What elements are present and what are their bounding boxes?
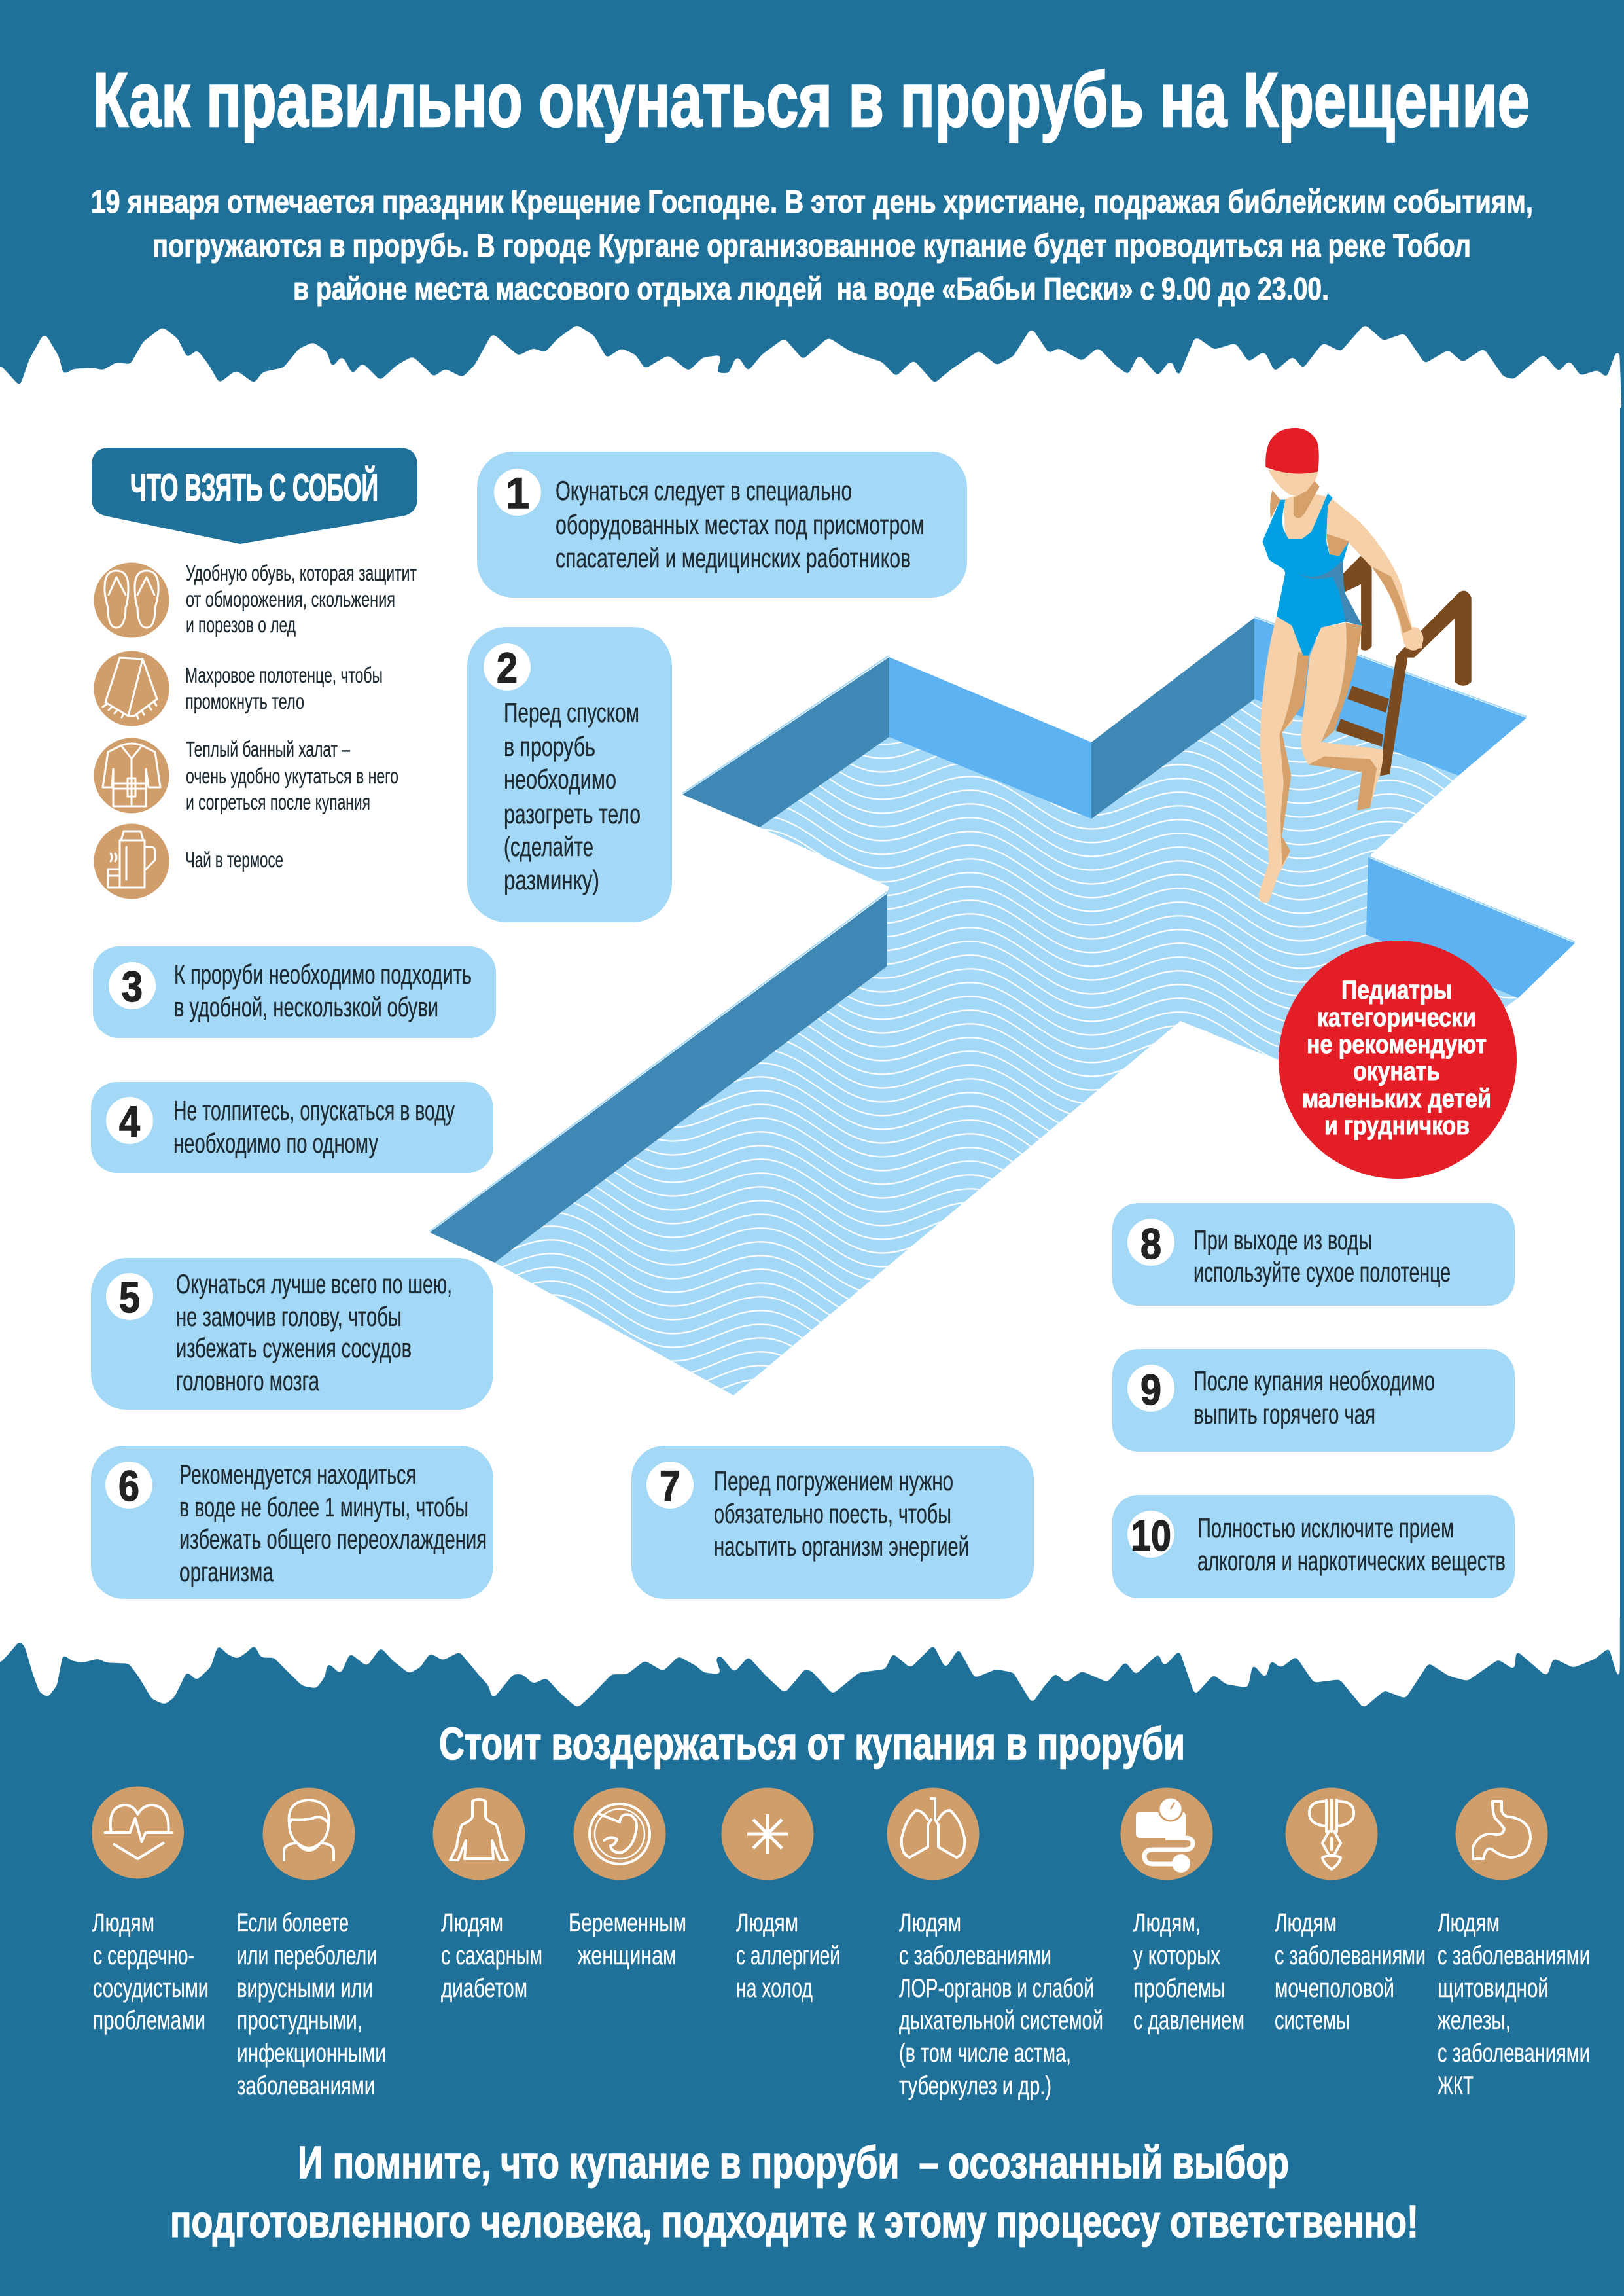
column: viral diseases: простудными,: [237, 2006, 362, 2035]
column: diabetes: диабетом: [441, 1974, 527, 2003]
illustration: cross-shaped ice hole: [430, 428, 1575, 1395]
tip 8: используйте сухое полотенце: [1193, 1257, 1451, 1287]
column: thyroid and gastrointestinal: ЖКТ: [1438, 2072, 1474, 2100]
column: respiratory: (в том числе астма,: [899, 2039, 1071, 2068]
column: cold allergy: с аллергией: [736, 1941, 840, 1970]
tip 3: 3: [122, 962, 143, 1011]
tip 7: насытить организм энергией: [714, 1531, 969, 1562]
swimmer: [1258, 428, 1423, 903]
text: footwear: и порезов о лед: [186, 613, 296, 637]
text: bathrobe: Теплый банный халат –: [186, 737, 350, 761]
text: towel: Махровое полотенце, чтобы: [185, 663, 383, 687]
tip 7: [631, 1446, 1034, 1599]
tip 6: Рекомендуется находиться: [179, 1459, 416, 1490]
icon: torso: [433, 1788, 525, 1880]
text: bathrobe: [186, 737, 398, 814]
icon: stomach: [1455, 1788, 1548, 1880]
column: blood pressure: у которых: [1133, 1941, 1220, 1970]
column: thyroid and gastrointestinal: [1438, 1909, 1590, 2100]
column: heart problems: сосудистыми: [93, 1974, 209, 2003]
text: footwear: [186, 561, 417, 637]
icon: snowflake: [721, 1788, 814, 1880]
tip 3: в удобной, нескользкой обуви: [174, 992, 438, 1022]
column: heart problems: Людям: [92, 1909, 154, 1937]
tip 9: После купания необходимо: [1193, 1365, 1435, 1396]
tip 2: необходимо: [504, 764, 616, 795]
callout: pediatricians warning: и грудничков: [1324, 1111, 1470, 1140]
callout: pediatricians warning: [1279, 941, 1517, 1179]
panel: what to take: [92, 448, 417, 899]
tip 1: Окунаться следует в специально: [556, 475, 852, 506]
text: footwear: от обморожения, скольжения: [186, 587, 395, 611]
closing message: [170, 2137, 1419, 2247]
icon: fetus: [573, 1788, 666, 1880]
column: viral diseases: заболеваниями: [237, 2072, 375, 2100]
icon: thermos: [94, 823, 169, 899]
header: [91, 57, 1533, 307]
heading banner: ЧТО ВЗЯТЬ С СОБОЙ: [130, 467, 378, 509]
tip 8: [1112, 1203, 1515, 1306]
column: viral diseases: вирусными или: [237, 1974, 373, 2003]
text: bathrobe: очень удобно укутаться в него: [186, 764, 398, 788]
text: bathrobe: и согреться после купания: [186, 790, 370, 814]
column: pregnant women: Беременным: [569, 1909, 686, 1937]
icon: person with sore throat: [263, 1788, 355, 1880]
tip 2: Перед спуском: [504, 697, 639, 728]
tip 6: организма: [179, 1556, 274, 1587]
callout: pediatricians warning: Педиатры: [1341, 976, 1452, 1005]
tip 5: Окунаться лучше всего по шею,: [176, 1268, 452, 1299]
tip 10: Полностью исключите прием: [1197, 1513, 1454, 1543]
tip 2: в прорубь: [504, 731, 595, 762]
pool floor with waves: [495, 699, 1518, 1395]
column: viral diseases: Если болеете: [237, 1909, 349, 1937]
column: diabetes: [441, 1909, 542, 2003]
tip 6: [91, 1446, 493, 1599]
tip 9: [1112, 1349, 1515, 1452]
closing message: И помните, что купание в проруби – осознанный выбор: [298, 2137, 1289, 2188]
tip 3: К проруби необходимо подходить: [174, 959, 472, 990]
intro paragraph: [91, 185, 1533, 307]
tip 7: обязательно поесть, чтобы: [714, 1498, 951, 1529]
tip 5: 5: [119, 1273, 140, 1321]
tip 5: [91, 1258, 493, 1410]
heading banner: [92, 448, 417, 544]
column: urinary: с заболеваниями: [1275, 1941, 1426, 1970]
tip 8: При выходе из воды: [1193, 1225, 1372, 1255]
tip 4: необходимо по одному: [173, 1128, 378, 1158]
tip 5: головного мозга: [176, 1365, 319, 1396]
text: towel: [185, 663, 383, 713]
tip 2: разминку): [504, 865, 599, 895]
tip 9: выпить горячего чая: [1193, 1399, 1375, 1429]
column: blood pressure: Людям,: [1133, 1909, 1201, 1937]
column: blood pressure: с давлением: [1133, 2006, 1244, 2035]
column: urinary: мочеполовой: [1275, 1974, 1394, 2003]
text: footwear: Удобную обувь, которая защитит: [186, 561, 417, 585]
column: thyroid and gastrointestinal: Людям: [1438, 1909, 1500, 1937]
column: cold allergy: на холод: [736, 1974, 813, 2003]
column: respiratory: [899, 1909, 1103, 2100]
tip 3: [93, 946, 496, 1038]
column: blood pressure: проблемы: [1133, 1974, 1226, 2003]
callout: pediatricians warning: окунать: [1353, 1057, 1440, 1086]
icon: urinary system: [1285, 1788, 1378, 1880]
column: heart problems: [92, 1909, 209, 2035]
column: blood pressure: [1133, 1909, 1244, 2035]
column: thyroid and gastrointestinal: железы,: [1438, 2006, 1511, 2035]
column: pregnant women: [569, 1909, 686, 1970]
column: respiratory: ЛОР-органов и слабой: [899, 1974, 1094, 2003]
callout: pediatricians warning: не рекомендуют: [1307, 1030, 1487, 1059]
column: pregnant women: женщинам: [578, 1941, 677, 1970]
column: diabetes: с сахарным: [441, 1941, 542, 1970]
column: heart problems: с сердечно-: [93, 1941, 194, 1970]
tip 8: 8: [1140, 1219, 1161, 1268]
column: thyroid and gastrointestinal: щитовидной: [1438, 1974, 1549, 2003]
column: viral diseases: [237, 1909, 386, 2100]
tip 2: [467, 627, 672, 922]
column: viral diseases: инфекционными: [237, 2039, 386, 2068]
tip 10: 10: [1131, 1511, 1171, 1560]
icon: blood pressure monitor: [1120, 1788, 1213, 1880]
tip 1: оборудованных местах под присмотром: [556, 509, 925, 540]
column: urinary: Людям: [1275, 1909, 1337, 1937]
tip 7: Перед погружением нужно: [714, 1465, 953, 1496]
tip 10: [1112, 1495, 1515, 1598]
column: respiratory: с заболеваниями: [899, 1941, 1051, 1970]
column: respiratory: Людям: [899, 1909, 961, 1937]
callout: pediatricians warning: категорически: [1317, 1003, 1476, 1032]
column: respiratory: дыхательной системой: [899, 2006, 1103, 2035]
pool walls: [430, 617, 1575, 1263]
white central area with ice edges: [0, 326, 1624, 1707]
column: urinary: системы: [1275, 2006, 1350, 2035]
tip 2: 2: [497, 643, 518, 692]
tip 5: не замочив голову, чтобы: [176, 1301, 402, 1332]
tip 6: в воде не более 1 минуты, чтобы: [179, 1492, 468, 1522]
tip 6: 6: [118, 1462, 139, 1510]
tip 4: 4: [119, 1097, 140, 1145]
column: heart problems: проблемами: [93, 2006, 205, 2035]
icon: flip-flops: [94, 563, 169, 637]
tip 4: Не толпитесь, опускаться в воду: [173, 1095, 455, 1126]
icon: bathrobe: [94, 738, 169, 813]
icon: lungs: [887, 1788, 979, 1880]
column: diabetes: Людям: [441, 1909, 503, 1937]
tip 1: 1: [506, 469, 529, 517]
ladder and swimmer: [1258, 428, 1472, 903]
tip 4: [91, 1082, 493, 1173]
column: cold allergy: Людям: [736, 1909, 798, 1937]
tip 7: 7: [660, 1462, 680, 1510]
intro paragraph: в районе места массового отдыха людей на воде «Бабьи Пески» с 9.00 до 23.00.: [293, 272, 1329, 307]
tip 9: 9: [1140, 1365, 1161, 1414]
tip 2: разогреть тело: [504, 798, 641, 829]
column: respiratory: туберкулез и др.): [899, 2072, 1051, 2100]
tip 5: избежать сужения сосудов: [176, 1333, 412, 1363]
tip 1: спасателей и медицинских работников: [556, 543, 911, 573]
column: cold allergy: [736, 1909, 840, 2003]
text: towel: промокнуть тело: [185, 689, 304, 713]
tip 1: [477, 452, 967, 598]
text: thermos: Чай в термосе: [185, 848, 283, 872]
tip 6: избежать общего переохлаждения: [179, 1524, 487, 1554]
heading: who should abstain: Стоит воздержаться от купания в проруби: [439, 1718, 1185, 1769]
callout: pediatricians warning: маленьких детей: [1302, 1085, 1491, 1113]
tip 2: (сделайте: [504, 831, 593, 862]
icon: heart: [92, 1787, 184, 1878]
column: viral diseases: или переболели: [237, 1941, 377, 1970]
icon: towel: [94, 651, 169, 726]
ladder: [1336, 556, 1472, 776]
column: urinary: [1275, 1909, 1426, 2035]
